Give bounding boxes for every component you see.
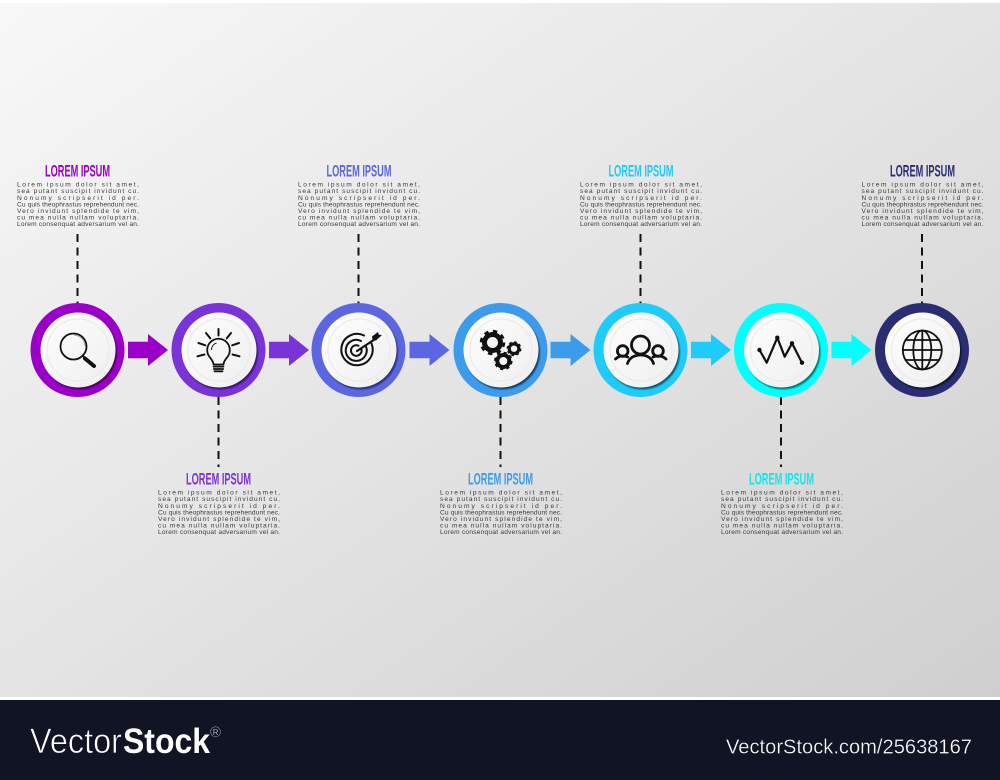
text block: step 4: cu mea nulla nullam voluptaria.	[440, 523, 562, 530]
heading: step 2: LOREM IPSUM	[186, 470, 251, 488]
text block: step 3	[298, 182, 420, 228]
ring: step 5	[594, 303, 688, 397]
dashed connector: step 5	[640, 234, 642, 303]
text block: step 7: sea putant suscipit invidunt cu.	[862, 188, 984, 195]
icon: light bulb	[198, 329, 240, 371]
ring: step 7	[875, 303, 969, 397]
icon: group of people	[616, 336, 666, 364]
dashed connector: step 3	[358, 234, 360, 303]
text block: step 2: sea putant suscipit invidunt cu.	[158, 496, 280, 503]
heading: step 5: LOREM IPSUM	[608, 162, 674, 180]
text block: step 1: Lorem consenquat adversarium vel an.	[17, 221, 139, 228]
text block: step 7: Cu quis theophrastus reprehendunt nec.	[862, 201, 984, 208]
disc: step 1	[40, 312, 117, 390]
text block: step 5: Cu quis theophrastus reprehendunt nec.	[580, 201, 702, 208]
text block: step 5: cu mea nulla nullam voluptaria.	[580, 215, 702, 222]
text block: step 3: Nonumy scripserit id per.	[298, 195, 420, 202]
text block: step 5: Lorem ipsum dolor sit amet,	[580, 182, 702, 189]
text block: step 6: Nonumy scripserit id per.	[721, 503, 843, 510]
heading: step 4: LOREM IPSUM	[468, 470, 533, 488]
text block: step 1: Cu quis theophrastus reprehendunt nec.	[17, 201, 139, 208]
heading: step 3: LOREM IPSUM	[326, 162, 392, 180]
footer registered mark: ®	[210, 724, 221, 741]
text block: step 4: Lorem consenquat adversarium vel an.	[440, 529, 562, 536]
arrow 5	[691, 334, 731, 366]
text block: step 7: cu mea nulla nullam voluptaria.	[862, 215, 984, 222]
step 5: people	[580, 162, 702, 397]
step 3: target	[298, 162, 420, 397]
step 4: gears	[440, 303, 562, 536]
text block: step 1: Vero invidunt splendide te vim,	[17, 208, 139, 215]
disc: step 5	[604, 312, 680, 390]
text block: step 1: Lorem ipsum dolor sit amet,	[17, 182, 139, 189]
text block: step 1: Nonumy scripserit id per.	[17, 195, 139, 202]
ring: step 4	[454, 303, 548, 397]
icon: magnifying glass	[60, 334, 94, 366]
footer logo: Vector: Vector	[30, 722, 122, 761]
text block: step 7: Lorem consenquat adversarium vel an.	[862, 221, 984, 228]
text block: step 4: Lorem ipsum dolor sit amet,	[440, 490, 562, 497]
text block: step 1	[17, 182, 139, 228]
ring: step 3	[312, 303, 406, 397]
dashed connector: step 7	[921, 234, 923, 303]
dashed connector: step 6	[780, 397, 782, 467]
text block: step 7: Vero invidunt splendide te vim,	[862, 208, 984, 215]
text block: step 2: Lorem ipsum dolor sit amet,	[158, 490, 280, 497]
disc: step 4	[464, 312, 540, 390]
text block: step 4: sea putant suscipit invidunt cu.	[440, 496, 562, 503]
text block: step 3: Lorem consenquat adversarium vel an.	[298, 221, 420, 228]
disc: step 2	[182, 312, 258, 390]
text block: step 2: Lorem consenquat adversarium vel an.	[158, 529, 280, 536]
text block: step 3: Cu quis theophrastus reprehendunt nec.	[298, 201, 420, 208]
text block: step 1: sea putant suscipit invidunt cu.	[17, 188, 139, 195]
dashed connector: step 4	[500, 397, 502, 467]
text block: step 3: cu mea nulla nullam voluptaria.	[298, 215, 420, 222]
disc: step 6	[744, 312, 820, 390]
icon: globe	[903, 330, 942, 370]
text block: step 2: Vero invidunt splendide te vim,	[158, 516, 280, 523]
icon: target with dart	[341, 332, 382, 365]
arrow 4	[550, 334, 590, 366]
text block: step 7: Nonumy scripserit id per.	[862, 195, 984, 202]
text block: step 5: Vero invidunt splendide te vim,	[580, 208, 702, 215]
heading: step 6: LOREM IPSUM	[749, 470, 814, 488]
text block: step 4: Vero invidunt splendide te vim,	[440, 516, 562, 523]
text block: step 5: sea putant suscipit invidunt cu.	[580, 188, 702, 195]
ring: step 2	[172, 303, 266, 397]
text block: step 7	[862, 182, 984, 228]
text block: step 4: Cu quis theophrastus reprehendunt nec.	[440, 509, 562, 516]
footer logo: Stock: Stock	[123, 722, 210, 761]
text block: step 4: Nonumy scripserit id per.	[440, 503, 562, 510]
heading: step 1: LOREM IPSUM	[45, 162, 110, 180]
arrow 6	[832, 334, 872, 366]
arrow 3	[410, 334, 450, 366]
text block: step 4	[440, 490, 562, 536]
text block: step 6: Cu quis theophrastus reprehendunt nec.	[721, 509, 843, 516]
ring: step 6	[734, 303, 828, 397]
text block: step 6: cu mea nulla nullam voluptaria.	[721, 523, 843, 530]
text block: step 5	[580, 182, 702, 228]
text block: step 1: cu mea nulla nullam voluptaria.	[17, 215, 139, 222]
step 2: idea	[158, 303, 280, 536]
dashed connector: step 1	[76, 234, 78, 303]
footer bar	[0, 700, 1000, 780]
icon: gears	[482, 332, 520, 369]
text block: step 5: Nonumy scripserit id per.	[580, 195, 702, 202]
arrow 2	[269, 334, 309, 366]
text block: step 3: sea putant suscipit invidunt cu.	[298, 188, 420, 195]
text block: step 7: Lorem ipsum dolor sit amet,	[862, 182, 984, 189]
text block: step 3: Vero invidunt splendide te vim,	[298, 208, 420, 215]
footer image id: VectorStock.com/25638167	[726, 736, 972, 758]
disc: step 7	[885, 312, 962, 390]
icon: line chart	[757, 336, 804, 365]
text block: step 6: sea putant suscipit invidunt cu.	[721, 496, 843, 503]
text block: step 6: Vero invidunt splendide te vim,	[721, 516, 843, 523]
text block: step 6	[721, 490, 843, 536]
step 7: globe	[862, 162, 984, 397]
text block: step 2: Nonumy scripserit id per.	[158, 503, 280, 510]
text block: step 2: cu mea nulla nullam voluptaria.	[158, 523, 280, 530]
text block: step 5: Lorem consenquat adversarium vel an.	[580, 221, 702, 228]
text block: step 2	[158, 490, 280, 536]
step 1: search	[17, 162, 139, 397]
text block: step 6: Lorem ipsum dolor sit amet,	[721, 490, 843, 497]
arrow 1	[128, 334, 168, 366]
step 6: chart	[721, 303, 843, 536]
ring: step 1	[30, 303, 124, 397]
disc: step 3	[322, 312, 398, 390]
text block: step 6: Lorem consenquat adversarium vel an.	[721, 529, 843, 536]
text block: step 2: Cu quis theophrastus reprehendunt nec.	[158, 509, 280, 516]
text block: step 3: Lorem ipsum dolor sit amet,	[298, 182, 420, 189]
dashed connector: step 2	[218, 397, 220, 467]
